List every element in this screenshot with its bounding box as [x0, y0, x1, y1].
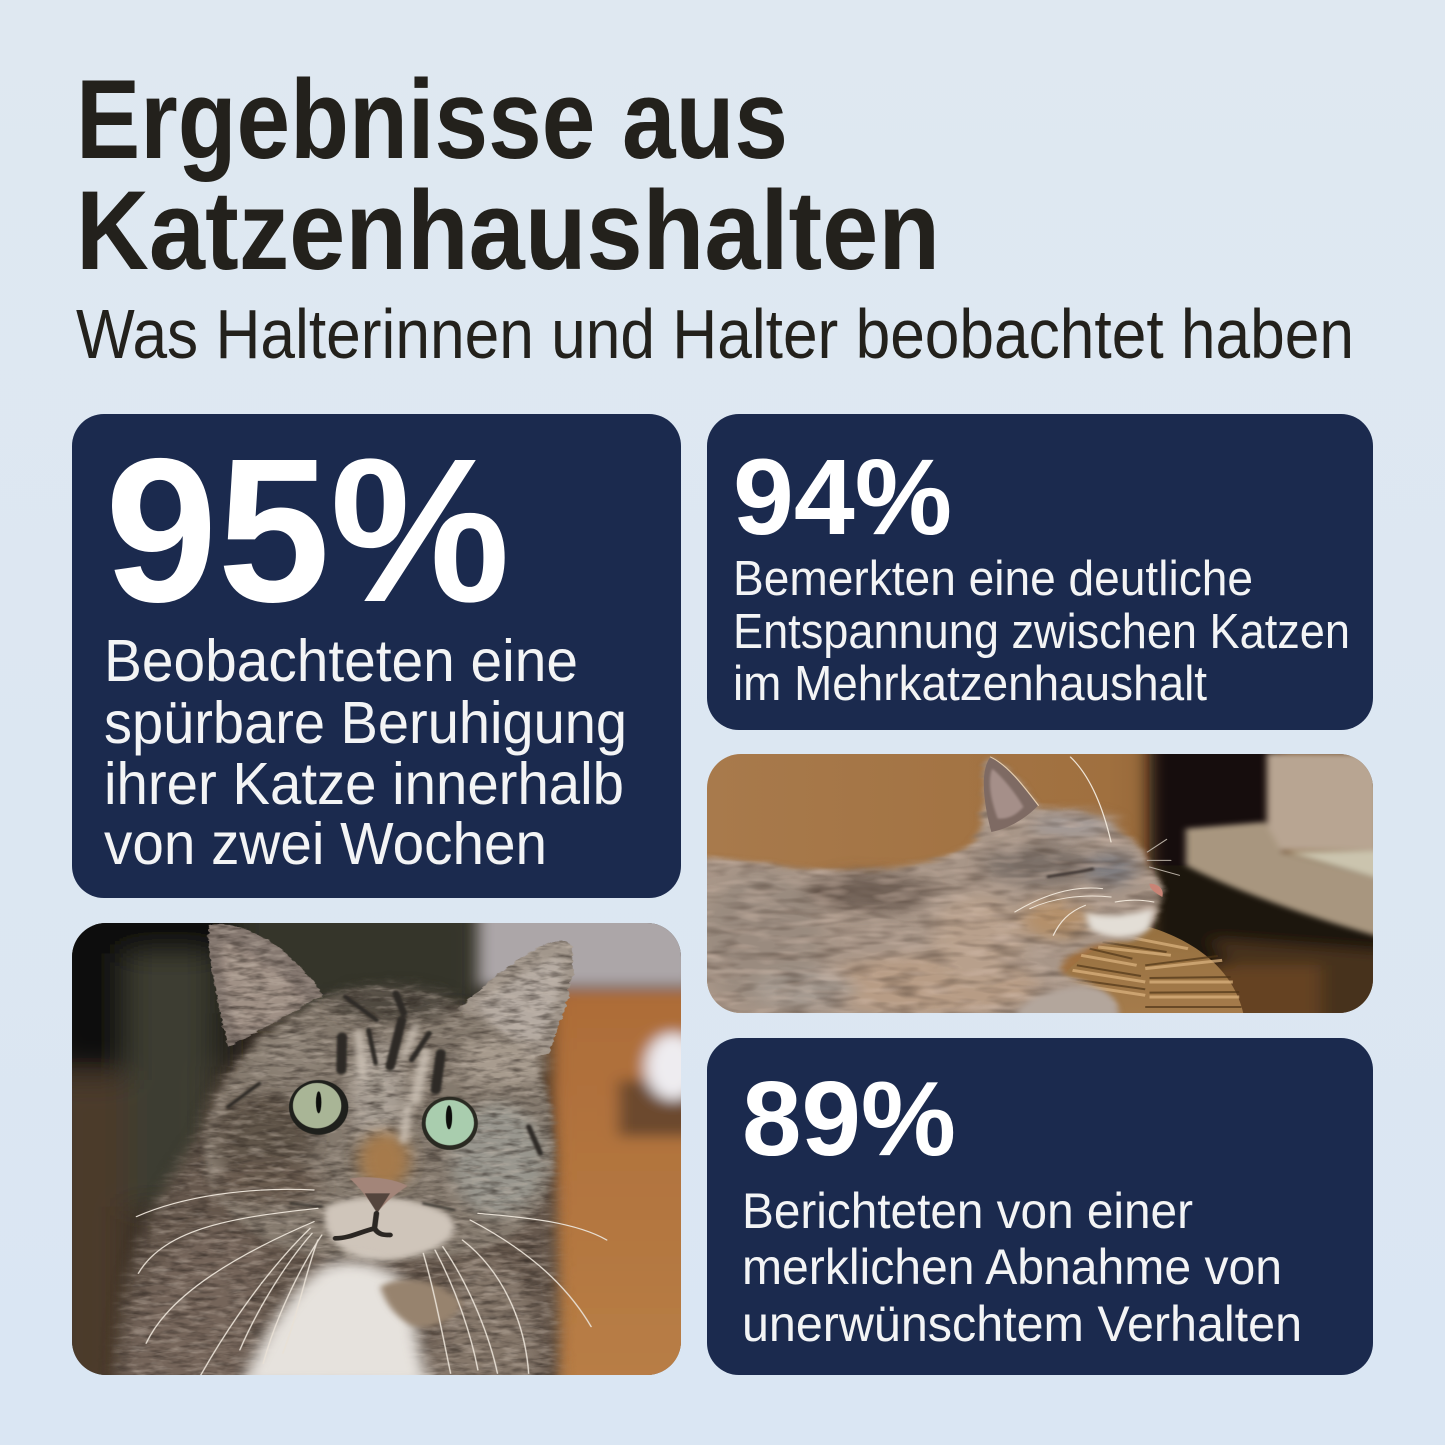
statistic: 95%: 95%: [105, 416, 510, 645]
photo: sleeping cat on scratcher: [707, 754, 1373, 1013]
cat muzzle: [1085, 909, 1154, 937]
cat nose bridge: [359, 1132, 410, 1188]
cat body: [115, 1007, 557, 1387]
cat ears: [208, 924, 324, 1047]
description: 94 percent: im Mehrkatzenhaushalt: [733, 657, 1207, 711]
description: 89 percent: merklichen Abnahme von: [742, 1239, 1282, 1295]
description: 89 percent: unerwünschtem Verhalten: [742, 1296, 1302, 1352]
shelf and post: [1186, 754, 1380, 937]
cat body and head: [696, 757, 1163, 1022]
cat muzzle and chest: [240, 1197, 462, 1387]
statistic: 89%: 89%: [742, 1060, 956, 1178]
cat whiskers: [136, 1189, 607, 1375]
description: 95 percent: von zwei Wochen: [104, 811, 547, 877]
cat fur: [696, 757, 1163, 1022]
description: 89 percent: [742, 1183, 1302, 1352]
description: 94 percent: Bemerkten eine deutliche: [733, 552, 1253, 606]
cat head: [204, 989, 553, 1261]
cat ear: [984, 757, 1038, 832]
description: 95 percent: spürbare Beruhigung: [104, 690, 627, 756]
cat whiskers: [991, 757, 1179, 935]
description: 95 percent: ihrer Katze innerhalb: [104, 751, 624, 817]
title: [76, 57, 940, 293]
cat nose and mouth: [335, 1177, 408, 1238]
cat paw: [1014, 984, 1120, 1013]
panel: 95 percent: [72, 414, 681, 898]
cat eyes: [289, 1080, 478, 1150]
cat fur: [115, 924, 573, 1387]
description: 89 percent: Berichteten von einer: [742, 1183, 1193, 1239]
title: Katzenhaushalten: [76, 168, 940, 293]
description: 94 percent: [733, 552, 1350, 711]
scratcher: [1069, 927, 1244, 1013]
cat tabby stripes: [228, 993, 540, 1210]
description: 94 percent: Entspannung zwischen Katzen: [733, 605, 1350, 659]
panel: 94 percent: [707, 414, 1373, 730]
description: 95 percent: [104, 628, 627, 877]
cat nose: [1149, 884, 1163, 897]
description: 95 percent: Beobachteten eine: [104, 628, 578, 694]
statistic: 94%: 94%: [733, 436, 952, 557]
photo: tabby cat looking up: [72, 923, 681, 1375]
title: Ergebnisse aus: [76, 57, 788, 182]
cat closed eye: [1047, 869, 1094, 877]
panel: 89 percent: [707, 1038, 1373, 1375]
